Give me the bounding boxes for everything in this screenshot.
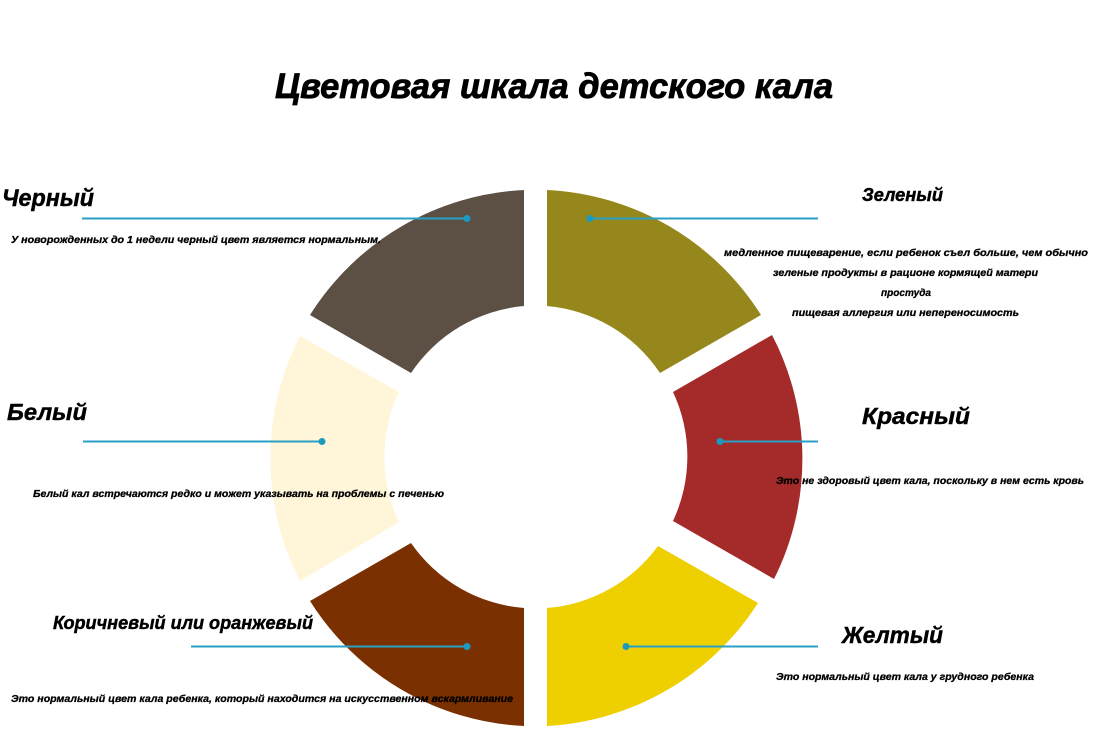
donut chart bbox=[270, 190, 802, 726]
text: green: медленное пищеварение, если ребенок съел больше, чем обычно bbox=[724, 247, 1089, 259]
leader line: green bbox=[586, 215, 818, 222]
text: green: зеленые продукты в рационе кормящей матери bbox=[773, 267, 1039, 279]
segment: red bbox=[673, 335, 802, 579]
segment: green bbox=[547, 190, 761, 373]
leader line: black bbox=[82, 215, 470, 222]
callout: brown bbox=[11, 612, 513, 705]
heading: yellow: Желтый bbox=[841, 622, 943, 648]
callout: green bbox=[586, 185, 1089, 319]
segment: brown bbox=[310, 543, 524, 726]
heading: black: Черный bbox=[2, 185, 94, 212]
text: white: Белый кал встречаются редко и может указывать на проблемы с печенью bbox=[33, 488, 444, 500]
text: green: пищевая аллергия или непереносимость bbox=[792, 307, 1019, 319]
leader line: brown bbox=[191, 643, 470, 650]
heading: white: Белый bbox=[7, 399, 87, 425]
leader line: red bbox=[716, 438, 818, 445]
heading: green: Зеленый bbox=[862, 185, 943, 205]
heading: brown: Коричневый или оранжевый bbox=[53, 612, 313, 633]
text: brown: Это нормальный цвет кала ребенка, который находится на искусственном вскармливание bbox=[11, 693, 513, 705]
text: yellow: Это нормальный цвет кала у грудного ребенка bbox=[776, 671, 1034, 683]
leader line: white bbox=[83, 438, 326, 445]
segment: white bbox=[270, 336, 399, 581]
text: green bbox=[724, 247, 1089, 319]
leader line: yellow bbox=[622, 643, 818, 650]
heading: red: Красный bbox=[862, 403, 970, 429]
title: Цветовая шкала детского кала bbox=[275, 67, 833, 106]
callout: white bbox=[7, 399, 444, 500]
callout: yellow bbox=[622, 622, 1034, 683]
text: green: простуда bbox=[881, 287, 931, 299]
text: black: У новорожденных до 1 недели черный цвет является нормальным. bbox=[11, 234, 381, 246]
segment: black bbox=[310, 190, 524, 373]
text: red: Это не здоровый цвет кала, поскольку в нем есть кровь bbox=[776, 475, 1084, 487]
callout: black bbox=[2, 185, 470, 246]
callout: red bbox=[716, 403, 1084, 487]
segment: yellow bbox=[547, 546, 758, 726]
